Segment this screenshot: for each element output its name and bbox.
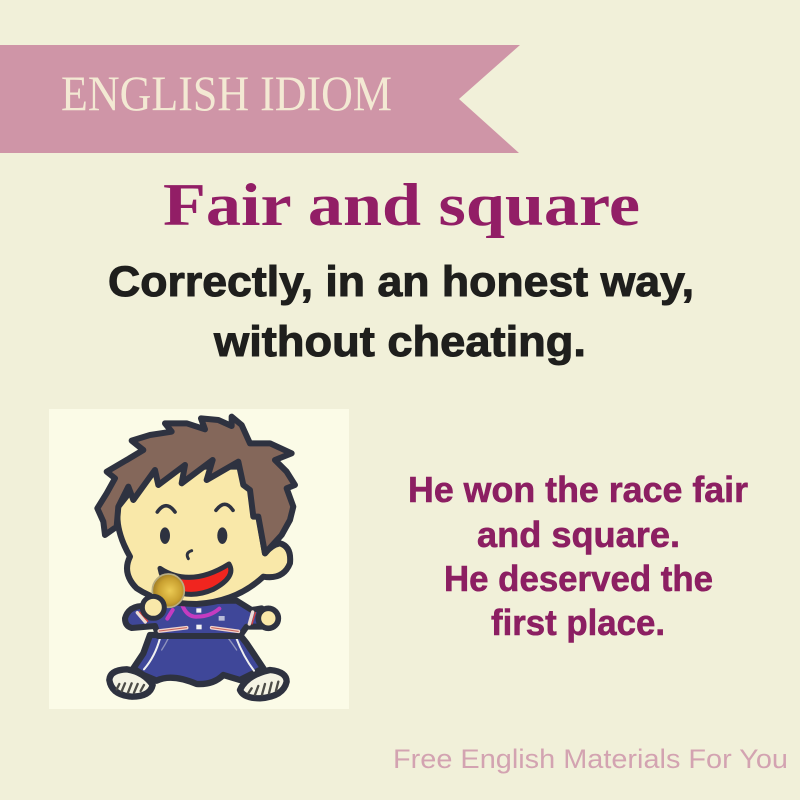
boy body [109, 601, 287, 698]
definition text [108, 258, 694, 366]
example sentence [408, 469, 748, 643]
trousers [133, 635, 263, 684]
banner ribbon [0, 45, 520, 153]
icon: boy biting gold medal [97, 417, 295, 698]
mouth [160, 564, 231, 594]
footer credit: Free English Materials For You [393, 744, 788, 774]
right hand [258, 608, 278, 628]
definition text: Correctly, in an honest way, [108, 258, 694, 306]
example sentence: He deserved the [444, 558, 713, 599]
shoes [109, 669, 153, 697]
face and ear [117, 467, 290, 604]
jacket [125, 601, 262, 636]
eyebrows [157, 504, 233, 512]
hair [97, 417, 295, 553]
example sentence: He won the race fair [408, 469, 748, 510]
definition text: without cheating. [213, 318, 586, 366]
nose [187, 551, 192, 559]
gold medal [152, 574, 184, 607]
eyes [160, 527, 170, 544]
idiom title: Fair and square [163, 172, 640, 238]
example sentence: first place. [491, 602, 665, 643]
left hand [142, 596, 164, 618]
example sentence: and square. [477, 514, 680, 555]
banner label: ENGLISH IDIOM [61, 65, 392, 121]
illustration panel [49, 409, 349, 709]
